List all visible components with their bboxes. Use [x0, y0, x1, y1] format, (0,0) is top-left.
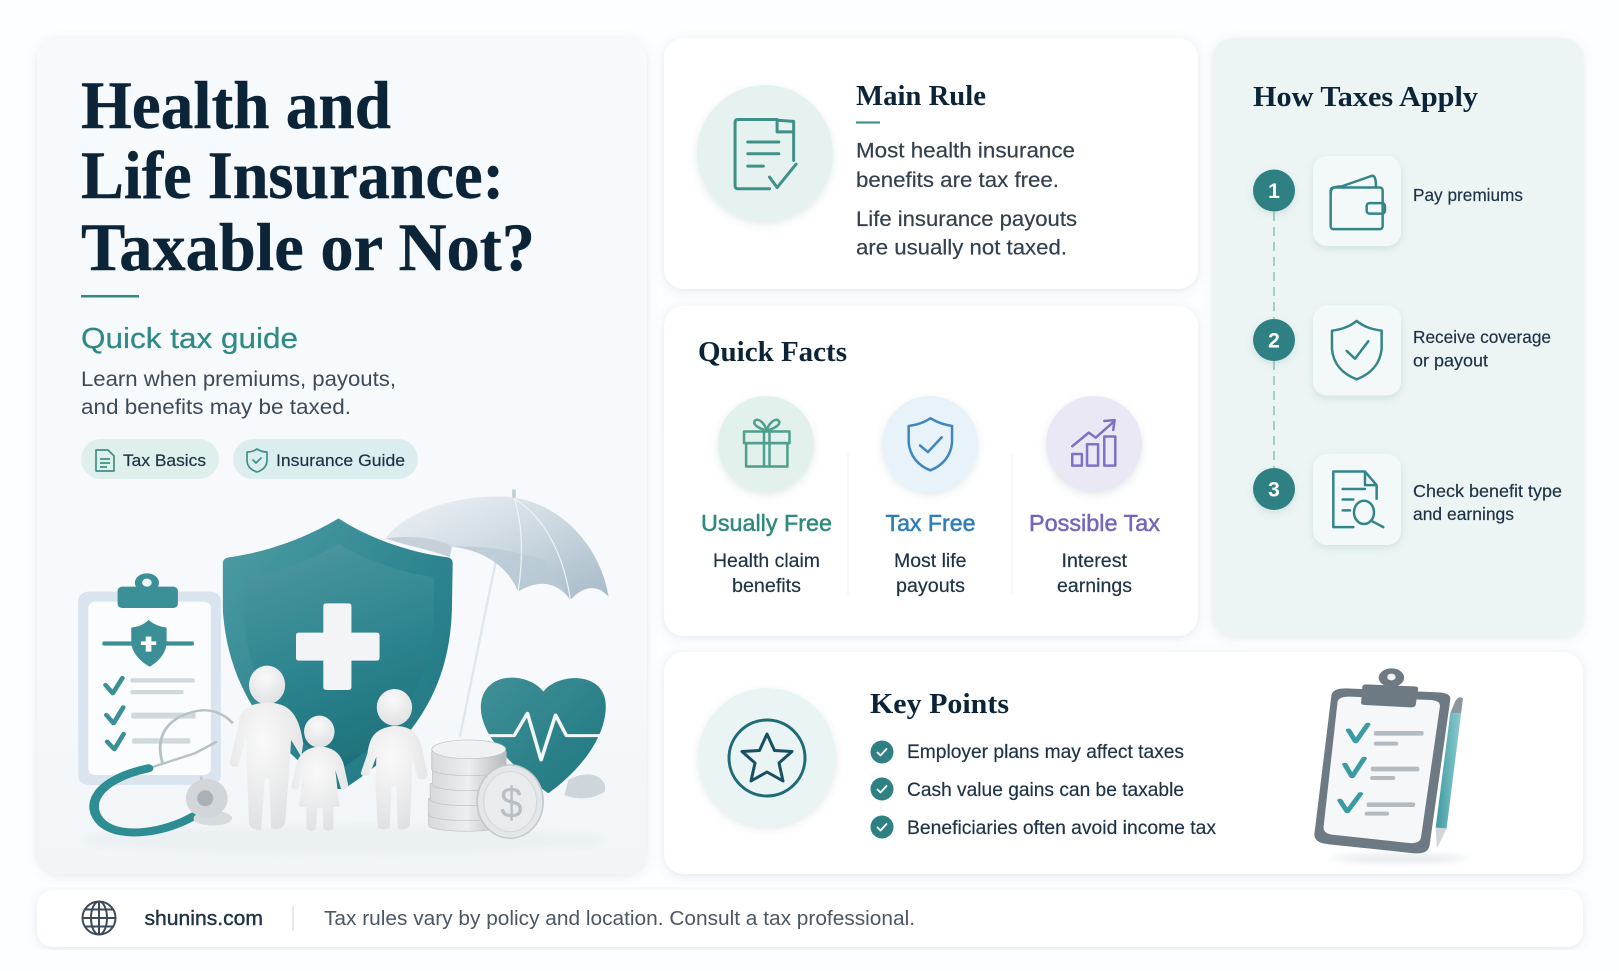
fact: possible tax [1029, 396, 1160, 597]
panel: hero [37, 38, 647, 874]
fact: possible tax: Interest [1062, 551, 1128, 572]
stethoscope [94, 710, 233, 832]
footer bar [37, 890, 1583, 947]
tag: tax basics [81, 439, 219, 479]
main rule text: benefits are tax free. [856, 168, 1059, 192]
fact: possible tax: Possible Tax [1029, 510, 1160, 536]
family figures [230, 666, 428, 831]
step 2: or payout [1413, 350, 1488, 370]
intro text: and benefits may be taxed. [81, 396, 351, 419]
panel: main rule [664, 38, 1198, 289]
step 2: 2 [1268, 330, 1280, 352]
heart with pulse [481, 678, 606, 798]
icon: star badge [698, 688, 836, 826]
title: Life Insurance: [81, 137, 504, 213]
heading: quick facts: Quick Facts [698, 336, 847, 368]
heading: main rule: Main Rule [856, 80, 986, 112]
disclaimer: Tax rules vary by policy and location. Consult a tax professional. [324, 908, 915, 930]
panel: how taxes apply [1213, 38, 1583, 636]
subtitle: Quick tax guide [81, 323, 298, 355]
clipboard [78, 573, 221, 785]
step 1: 1 [1268, 180, 1280, 203]
step 3 [1253, 454, 1562, 545]
shield with cross [223, 518, 453, 789]
fact: usually free: benefits [732, 576, 801, 597]
heading: key points: Key Points [870, 688, 1009, 720]
intro text [81, 368, 396, 419]
main rule text: Life insurance payouts [856, 207, 1077, 231]
fact: usually free [701, 396, 832, 597]
main rule text: Most health insurance [856, 138, 1075, 162]
tag: insurance guide: Insurance Guide [276, 451, 405, 470]
fact: tax free: Most life [894, 551, 966, 572]
coin stack [429, 740, 506, 831]
intro text: Learn when premiums, payouts, [81, 368, 396, 391]
step 3: Check benefit type [1413, 481, 1562, 501]
dollar coin [477, 765, 543, 838]
title: Health and [81, 67, 391, 143]
tag: tax basics: Tax Basics [123, 451, 206, 470]
fact: tax free: Tax Free [886, 510, 976, 536]
key point list: Cash value gains can be taxable [907, 779, 1184, 801]
fact: usually free: Usually Free [701, 510, 832, 536]
umbrella [386, 489, 609, 737]
heading: how taxes apply: How Taxes Apply [1253, 81, 1479, 113]
illustration: insurance still life [78, 489, 609, 853]
fact: tax free [882, 396, 978, 597]
title: Taxable or Not? [81, 209, 535, 285]
panel: quick facts [664, 306, 1198, 636]
icon: globe [82, 902, 116, 934]
key point list: Employer plans may affect taxes [907, 741, 1184, 763]
dollar coin: $ [500, 778, 523, 827]
title [81, 67, 535, 285]
key point list [870, 740, 1216, 839]
website: shunins.com [144, 908, 263, 930]
step 1 [1253, 156, 1523, 246]
tag: insurance guide [233, 439, 418, 479]
fact: tax free: payouts [896, 576, 965, 597]
step 3: 3 [1268, 478, 1280, 502]
key point list: Beneficiaries often avoid income tax [907, 817, 1216, 839]
step 2: Receive coverage [1413, 327, 1551, 347]
fact: possible tax: earnings [1057, 576, 1132, 597]
step 1: Pay premiums [1413, 185, 1523, 205]
fact: usually free: Health claim [713, 551, 820, 572]
step 3: and earnings [1413, 504, 1514, 524]
step 2 [1253, 306, 1551, 396]
main rule text [856, 138, 1077, 260]
panel: key points [664, 652, 1583, 874]
icon: document with check [697, 85, 833, 221]
main rule text: are usually not taxed. [856, 236, 1067, 260]
illustration: clipboard with pen [1314, 668, 1466, 863]
